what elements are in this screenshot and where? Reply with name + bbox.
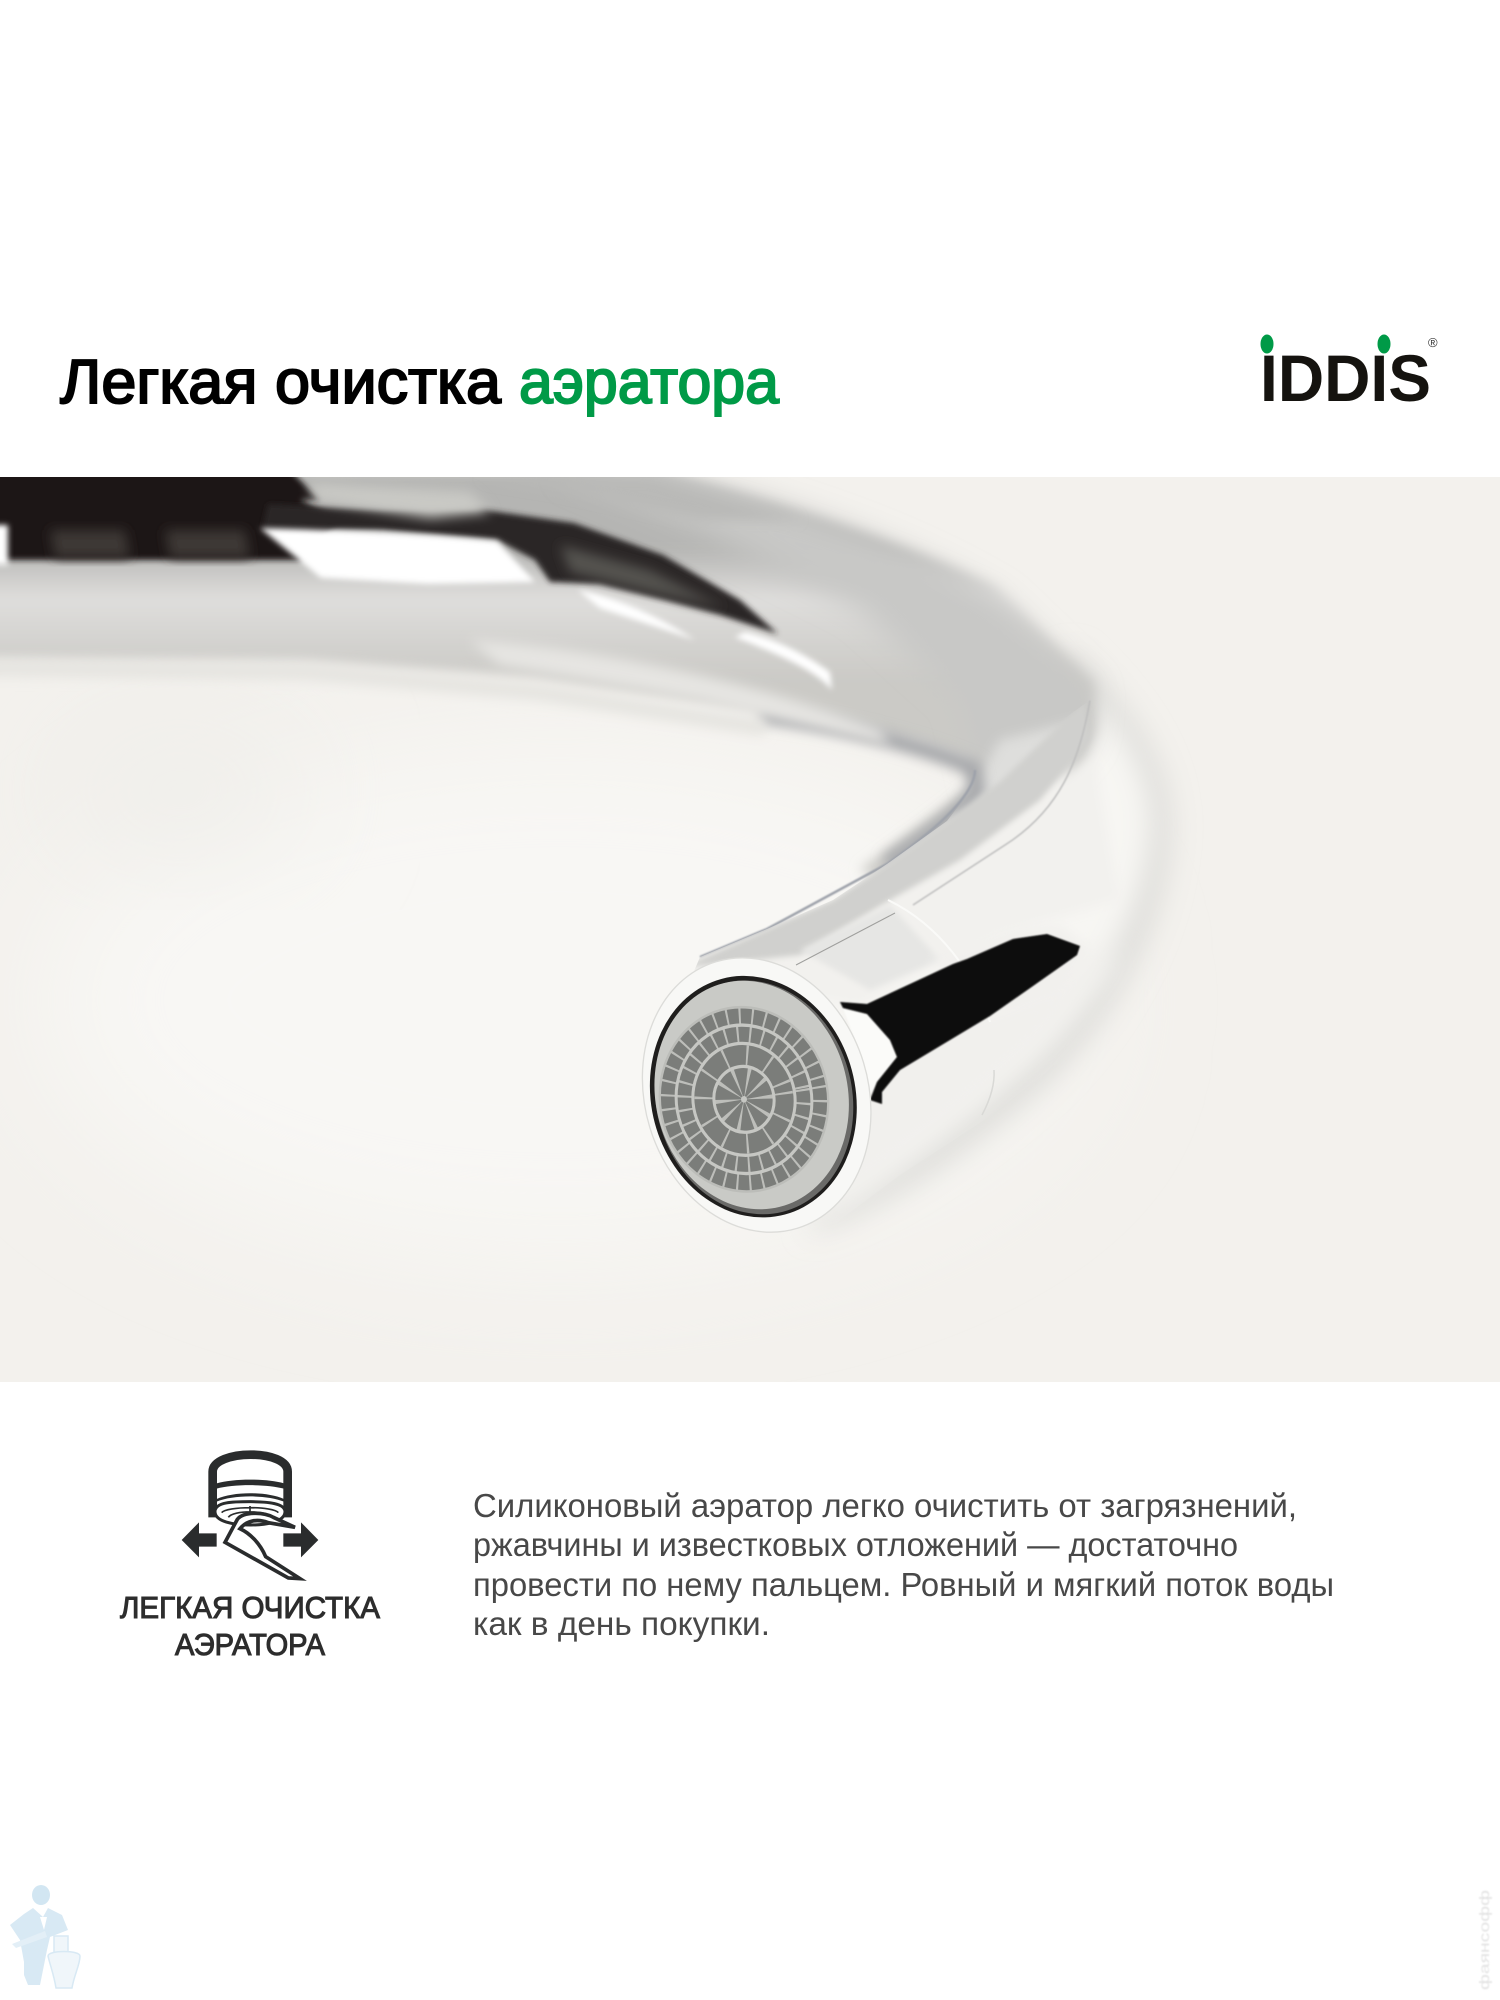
left arrow [182,1522,217,1557]
icon caption: АЭРАТОРА [175,1627,325,1662]
highlights [0,525,8,565]
spout: upper grey tube [0,470,1095,900]
white highlight by the rim [846,1010,896,1092]
aerator [642,958,872,1233]
watermark: vertical side text: фаянсофф [1476,1890,1492,1990]
nozzle sleeve [694,700,1090,1115]
logo: IDDIS: IDDIS [1260,341,1431,415]
right arrow [283,1522,318,1557]
photo: chrome faucet spout with aerator [0,470,1500,1382]
description text: ржавчины и известковых отложений — достаточно [473,1526,1238,1563]
description text: Силиконовый аэратор легко очистить от загрязнений, [473,1487,1297,1524]
title: Легкая очистка [60,348,502,417]
title: аэратора [519,348,779,417]
description text [473,1487,1334,1642]
chrome outer ring [642,958,872,1233]
inner lighter background patch [40,740,1080,1260]
dark top reflection [0,470,340,560]
logo: IDDIS: ® [1428,335,1438,350]
black reflection on nozzle [840,934,1080,1104]
spout: white outer flank [838,704,1156,1205]
icon: finger wiping aerator [182,1455,318,1579]
title [60,348,779,417]
description text: как в день покупки. [473,1605,770,1642]
description text: провести по нему пальцем. Ровный и мягкий поток воды [473,1566,1334,1603]
watermark: plumber with toilet [10,1885,80,1988]
dark inner rim [650,976,857,1218]
finger [225,1513,300,1579]
icon caption: ЛЕГКАЯ ОЧИСТКА [120,1590,380,1625]
aerator cup [213,1455,288,1525]
seam lines [796,913,895,965]
mesh disc [658,1006,830,1192]
interior edge shade [760,715,977,864]
icon caption [120,1590,380,1662]
light patch inside the tube [470,640,890,745]
spout: outer flank shadow [810,650,1170,1233]
